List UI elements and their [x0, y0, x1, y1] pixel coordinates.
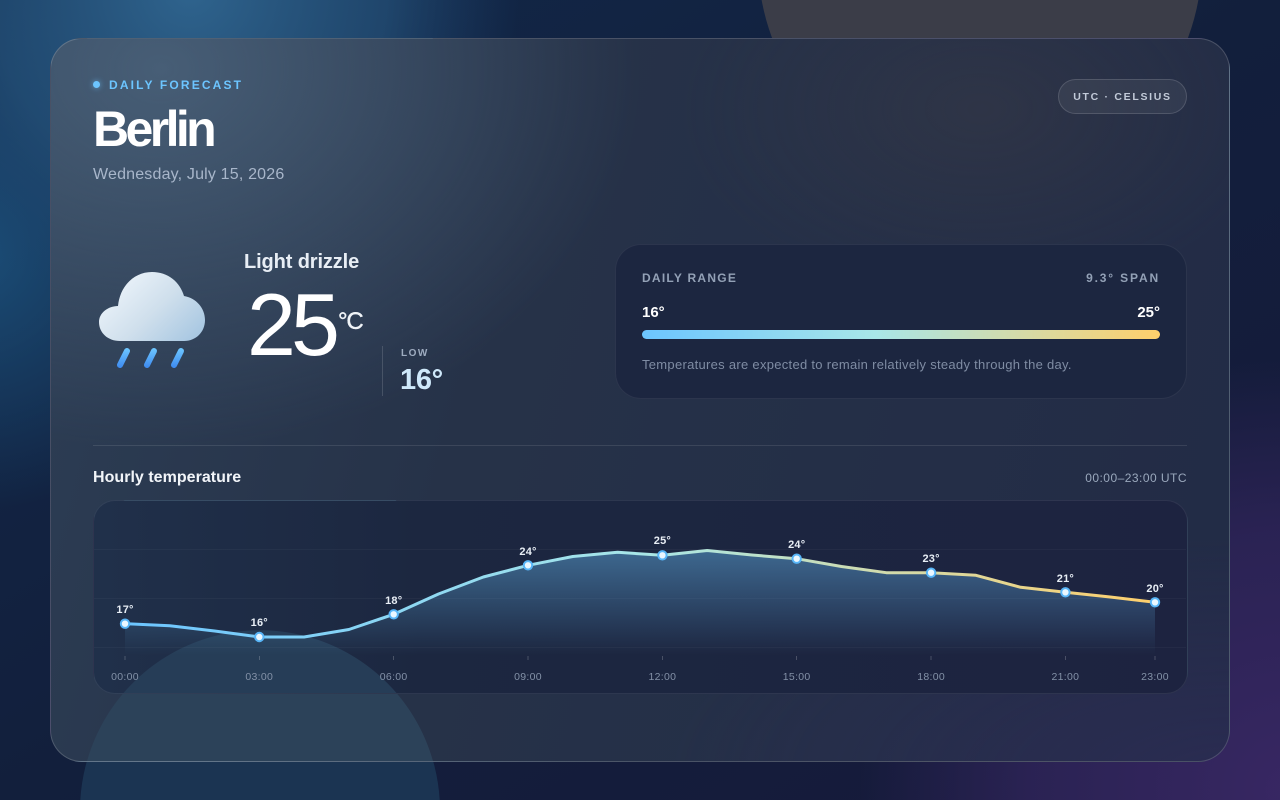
panel: hourly chart	[93, 500, 1188, 694]
data labels: 24°	[788, 539, 805, 551]
time axis labels: 03:00	[245, 671, 273, 683]
badge: units	[1058, 79, 1187, 114]
temperature line	[125, 550, 1155, 637]
current temperature: °C	[338, 308, 363, 335]
time axis labels: 09:00	[514, 671, 542, 683]
data labels: 20°	[1146, 583, 1164, 595]
text: range note: Temperatures are expected to remain relatively steady through the day.	[642, 357, 1072, 372]
eyebrow: daily forecast: DAILY FORECAST	[109, 78, 243, 92]
time axis labels: 18:00	[917, 671, 945, 683]
label: daily range: DAILY RANGE	[642, 271, 737, 285]
data labels: 24°	[519, 546, 537, 558]
current temperature: 25	[247, 275, 335, 374]
time axis labels: 06:00	[380, 671, 408, 683]
text: date: Wednesday, July 15, 2026	[93, 166, 284, 183]
range bar	[642, 330, 1160, 339]
label: span: 9.3° SPAN	[1086, 271, 1160, 285]
data labels	[116, 535, 1164, 629]
time axis labels: 23:00	[1141, 671, 1169, 683]
title: city name: Berlin	[93, 101, 213, 157]
time axis labels: 15:00	[783, 671, 811, 683]
time axis labels: 21:00	[1052, 671, 1079, 683]
stat: low temperature: 16°	[400, 364, 443, 396]
badge: units: UTC · CELSIUS	[1073, 91, 1172, 103]
data labels: 25°	[654, 535, 671, 547]
icon: rain cloud	[99, 272, 205, 368]
time axis labels: 00:00	[111, 671, 139, 683]
area under line	[125, 550, 1155, 655]
data labels: 16°	[251, 617, 268, 629]
data labels: 17°	[116, 604, 134, 616]
panel: daily range	[615, 244, 1187, 399]
time axis labels: 12:00	[649, 671, 676, 683]
data labels: 21°	[1057, 573, 1074, 585]
heading: hourly temperature: Hourly temperature	[93, 469, 241, 486]
data points	[121, 551, 1159, 641]
value: range low: 16°	[642, 304, 665, 321]
time axis labels	[111, 671, 1169, 683]
text: condition: Light drizzle	[244, 251, 359, 273]
data labels: 23°	[922, 553, 940, 565]
value: range high: 25°	[1137, 304, 1160, 321]
stat: low temperature	[382, 346, 453, 396]
stat: low temperature: LOW	[401, 348, 429, 359]
text: chart time range: 00:00–23:00 UTC	[1085, 471, 1187, 485]
data labels: 18°	[385, 595, 402, 607]
